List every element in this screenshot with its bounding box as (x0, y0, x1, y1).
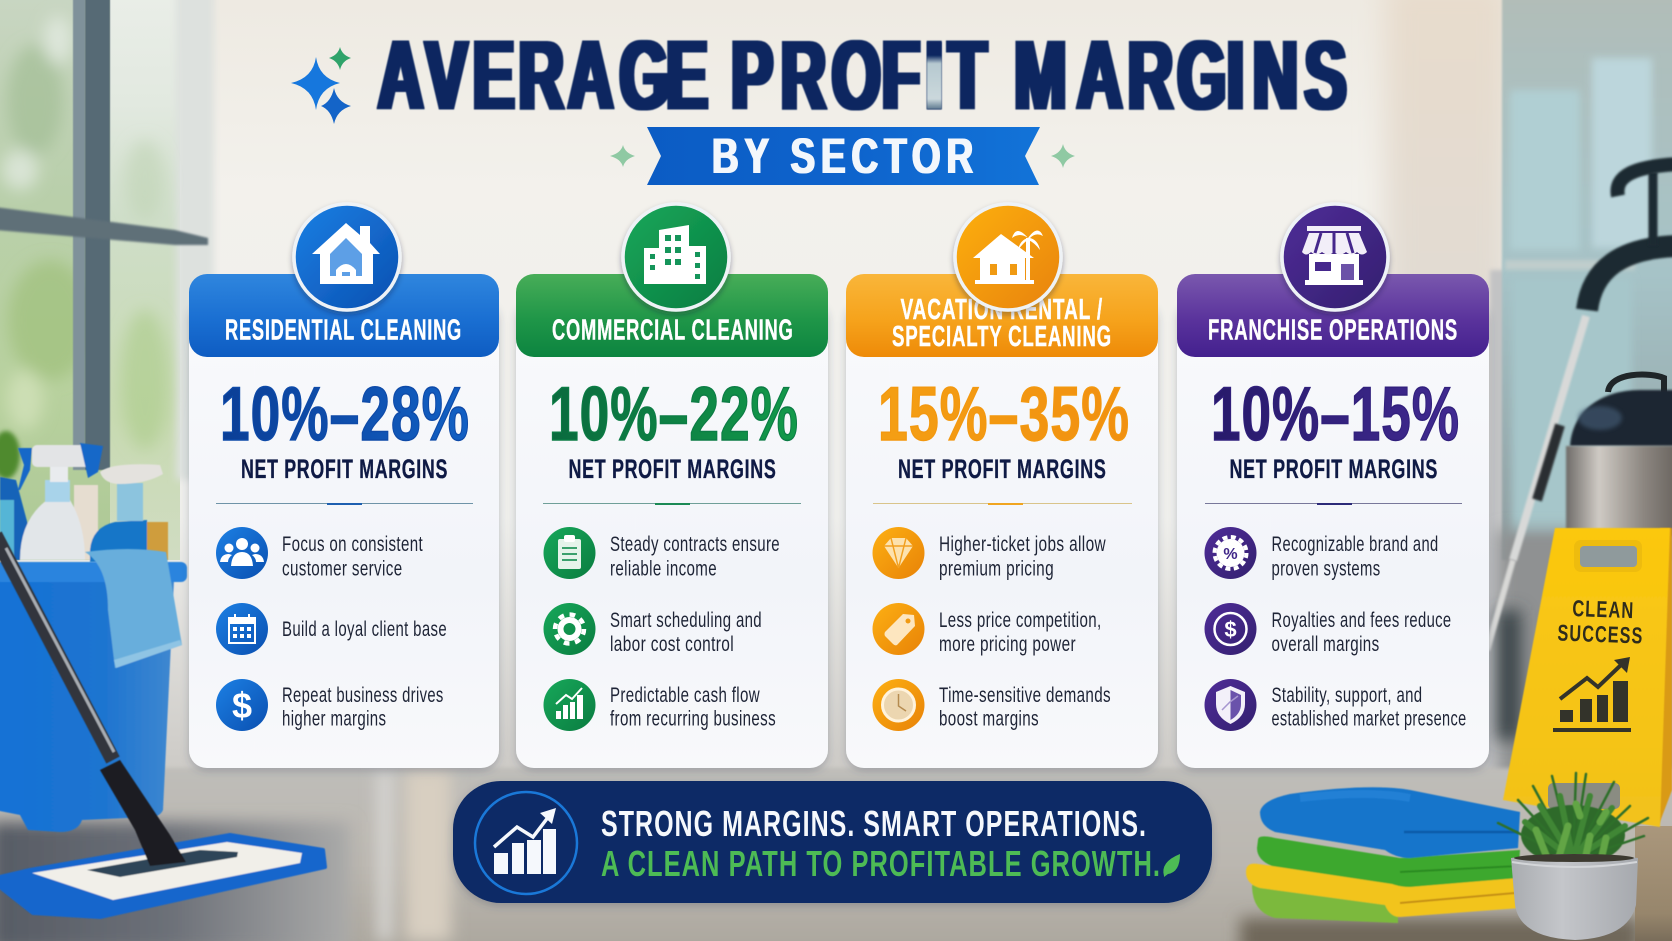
heading: VACATION RENTAL / (900, 294, 1103, 326)
item: stability and support (1204, 679, 1466, 731)
subtitle ribbon: by sector: BY SECTOR (712, 128, 979, 184)
panel: vacation rental and specialty cleaning (846, 204, 1158, 768)
callout banner: strong margins (453, 781, 1212, 903)
cleaning bottles (0, 431, 168, 562)
item: recognizable brand (1204, 527, 1438, 580)
item: less price competition (872, 603, 1102, 656)
big number: 10%–28% (220, 372, 470, 457)
item: higher ticket jobs (872, 527, 1106, 580)
item: predictable cash flow (544, 679, 776, 731)
item: royalties and fees: overall margins (1272, 633, 1380, 656)
label: NET PROFIT MARGINS (568, 454, 776, 484)
label: NET PROFIT MARGINS (1230, 454, 1438, 484)
item: repeat business: Repeat business drives (282, 684, 444, 707)
icon: beach house with palm (955, 204, 1061, 310)
heading (892, 294, 1112, 353)
vacuum cleaner (1487, 164, 1672, 650)
header band (1177, 274, 1489, 357)
header band (189, 274, 499, 357)
item: predictable cash flow: from recurring business (610, 708, 776, 730)
label: NET PROFIT MARGINS (241, 454, 448, 484)
item: steady contracts: reliable income (610, 558, 717, 580)
mop (0, 535, 325, 917)
item: smart scheduling: labor cost control (610, 633, 734, 656)
item: focus on customer service: Focus on consistent (282, 533, 423, 556)
heading: RESIDENTIAL CLEANING (225, 314, 462, 346)
icon: storefront (1282, 204, 1388, 310)
label: NET PROFIT MARGINS (898, 454, 1106, 484)
heading: FRANCHISE OPERATIONS (1208, 314, 1458, 346)
item: recognizable brand: proven systems (1272, 558, 1380, 580)
item: focus on customer service (216, 527, 423, 580)
wet floor style sign: clean success (1503, 528, 1672, 827)
item: less price competition: more pricing power (939, 633, 1076, 656)
potted plant (1498, 773, 1648, 940)
item: royalties and fees: $ (1224, 617, 1237, 642)
item: build a loyal client base: Build a loyal client base (282, 618, 447, 641)
heading: COMMERCIAL CLEANING (552, 314, 794, 346)
item: steady contracts: Steady contracts ensure (610, 533, 780, 556)
item: recognizable brand: % (1223, 546, 1238, 563)
item: repeat business: $ (232, 685, 252, 726)
item: stability and support: Stability, support, and (1272, 684, 1422, 707)
item: focus on customer service: customer service (282, 558, 402, 580)
icon: office building (623, 204, 729, 310)
sparkles beside title (291, 47, 351, 124)
item: time sensitive demands: Time-sensitive demands (939, 684, 1111, 707)
header band (846, 274, 1158, 357)
item: steady contracts (544, 527, 780, 580)
title: average profit margins: AVERAGE PROFIT MARGINS (378, 22, 1346, 130)
item: predictable cash flow: Predictable cash flow (610, 684, 760, 707)
panel: franchise operations (1177, 204, 1489, 768)
heading: SPECIALTY CLEANING (892, 321, 1112, 353)
panel: commercial cleaning (516, 204, 828, 768)
stacked microfiber towels (1246, 787, 1520, 923)
item: royalties and fees (1204, 603, 1452, 656)
item: smart scheduling: Smart scheduling and (610, 609, 762, 632)
item: less price competition: Less price competition, (939, 609, 1102, 632)
item: build a loyal client base (216, 603, 447, 655)
ribbon sparkles (610, 144, 1075, 168)
blue cleaning bucket with towel (0, 549, 187, 832)
item: royalties and fees: Royalties and fees reduce (1272, 609, 1452, 632)
icon: house (294, 204, 400, 310)
item: recognizable brand: Recognizable brand and (1272, 533, 1438, 556)
item: repeat business (216, 679, 444, 731)
panel: residential cleaning (189, 204, 499, 768)
item: time sensitive demands (872, 679, 1111, 731)
icon: leaf (1163, 854, 1180, 877)
item: higher ticket jobs: premium pricing (939, 558, 1054, 580)
wet floor style sign: clean success: CLEAN (1572, 595, 1635, 623)
callout banner: strong margins: A CLEAN PATH TO PROFITABLE GROWTH. (601, 843, 1161, 884)
item: stability and support: established market presence (1272, 708, 1466, 730)
icon: growth chart (475, 792, 577, 894)
item: time sensitive demands: boost margins (939, 708, 1039, 730)
header band (516, 274, 828, 357)
big number: 10%–15% (1211, 372, 1460, 457)
big number: 10%–22% (549, 372, 799, 457)
item: higher ticket jobs: Higher-ticket jobs allow (939, 533, 1106, 556)
item: smart scheduling (544, 603, 762, 656)
callout text: STRONG MARGINS. SMART OPERATIONS. (601, 803, 1147, 844)
big number: 15%–35% (878, 372, 1130, 457)
item: repeat business: higher margins (282, 708, 386, 730)
